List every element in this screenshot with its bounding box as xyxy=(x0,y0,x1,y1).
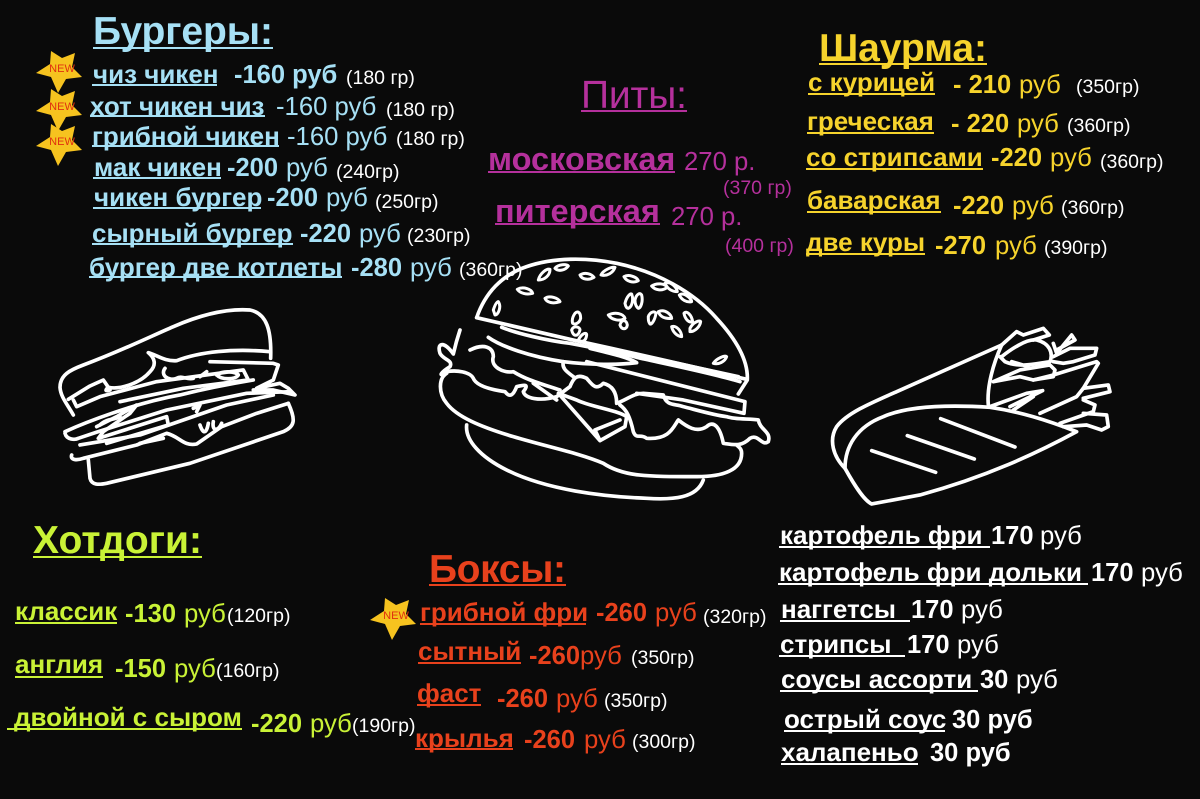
row: бургер две котлеты xyxy=(89,252,522,282)
heading: boxes: Боксы: xyxy=(429,548,566,591)
row: классик: классик xyxy=(15,596,118,626)
row: картофель фри: 170 xyxy=(991,522,1034,550)
row: соусы ассорти: руб xyxy=(1016,666,1058,694)
row: две куры: (390гр) xyxy=(1044,237,1107,259)
row: грибной фри xyxy=(420,597,766,628)
row: греческая: (360гр) xyxy=(1067,115,1130,137)
row: сытный: сытный xyxy=(418,636,521,666)
icon: new badge 2: NEW xyxy=(49,101,75,113)
row: со стрипсами: со стрипсами xyxy=(806,142,983,172)
row: классик: руб xyxy=(184,600,226,628)
icon: new badge 4: NEW xyxy=(383,610,409,622)
section: boxes xyxy=(415,548,766,754)
row: баварская: -220 xyxy=(953,192,1004,220)
row: наггетсы xyxy=(780,594,1003,624)
row: мак чикен xyxy=(93,152,399,183)
row: классик: -130 xyxy=(125,600,176,628)
row: бургер две котлеты: руб xyxy=(410,254,452,282)
row: англия: -150 xyxy=(115,655,166,683)
weight: 370: (370 гр) xyxy=(723,177,792,199)
icon: new badge 2 xyxy=(36,89,82,131)
row: крылья: руб xyxy=(584,726,626,754)
row: сырный бургер: сырный бургер xyxy=(92,218,293,248)
row: грибной фри: грибной фри xyxy=(420,597,588,627)
row: сытный: (350гр) xyxy=(631,647,694,669)
row: сытный xyxy=(418,636,694,670)
heading: hot dogs: Хотдоги: xyxy=(33,519,202,562)
row: острый соус: 30 руб xyxy=(952,706,1033,734)
row: фаст xyxy=(417,678,667,713)
row: питерская: питерская xyxy=(495,193,660,229)
row: чикен бургер: (250гр) xyxy=(375,191,438,213)
icon: new badge 3 xyxy=(36,124,82,166)
row: двойной с сыром: -220 xyxy=(251,710,302,738)
row: стрипсы xyxy=(779,629,999,659)
row: греческая: греческая xyxy=(807,106,934,136)
row: хот чикен чиз: -160 руб xyxy=(276,93,376,121)
section: pitas xyxy=(488,74,794,257)
row: со стрипсами: -220 xyxy=(991,144,1042,172)
heading: pitas: Питы: xyxy=(581,74,687,117)
row: грибной чикен: -160 руб xyxy=(287,123,387,151)
icon: burger line drawing xyxy=(439,259,769,499)
row: классик xyxy=(15,596,290,628)
row: грибной фри: -260 xyxy=(596,599,647,627)
row: баварская: руб xyxy=(1012,192,1054,220)
row: двойной с сыром: (190гр) xyxy=(352,715,415,737)
row: наггетсы: руб xyxy=(961,596,1003,624)
row: греческая: - 220 xyxy=(951,110,1009,138)
burger list xyxy=(89,59,522,282)
row: две куры: две куры xyxy=(806,227,925,257)
row: картофель фри дольки: картофель фри дольки xyxy=(779,557,1082,587)
row: сырный бургер: (230гр) xyxy=(407,225,470,247)
row: мак чикен: -200 xyxy=(227,154,278,182)
row: со стрипсами: руб xyxy=(1050,144,1092,172)
row: халапеньо xyxy=(781,737,1011,767)
row: питерская: 270 р. xyxy=(671,203,742,231)
section: hot dogs xyxy=(7,519,415,738)
row: сырный бургер: руб xyxy=(359,220,401,248)
row: московская: московская xyxy=(488,141,675,177)
row: картофель фри дольки: руб xyxy=(1141,559,1183,587)
row: грибной чикен xyxy=(92,121,465,151)
row: фаст: руб xyxy=(556,685,598,713)
row: соусы ассорти xyxy=(780,664,1058,694)
row: баварская: (360гр) xyxy=(1061,197,1124,219)
row: фаст: (350гр) xyxy=(604,690,667,712)
row: фаст: фаст xyxy=(417,678,482,708)
row: наггетсы: 170 xyxy=(911,596,954,624)
row: московская: 270 р. xyxy=(684,148,755,176)
row: с курицей: - 210 xyxy=(953,71,1011,99)
row: мак чикен: мак чикен xyxy=(94,152,222,182)
row: сырный бургер xyxy=(92,218,470,248)
row: халапеньо: 30 руб xyxy=(930,739,1011,767)
row: с курицей xyxy=(808,67,1139,99)
row: сытный: -260 xyxy=(529,642,580,670)
row: стрипсы: 170 xyxy=(907,631,950,659)
row: две куры xyxy=(806,227,1107,260)
row: грибной чикен: (180 гр) xyxy=(396,128,465,150)
row: картофель фри xyxy=(779,520,1082,550)
icon: new badge 3: NEW xyxy=(49,136,75,148)
row: стрипсы: руб xyxy=(957,631,999,659)
row: классик: (120гр) xyxy=(227,605,290,627)
row: крылья: крылья xyxy=(415,723,514,753)
row: две куры: руб xyxy=(995,232,1037,260)
row: картофель фри дольки: 170 xyxy=(1091,559,1134,587)
row: со стрипсами: (360гр) xyxy=(1100,151,1163,173)
row: наггетсы: наггетсы xyxy=(781,594,896,624)
row: греческая: руб xyxy=(1017,110,1059,138)
row: хот чикен чиз xyxy=(90,91,455,121)
row: хот чикен чиз: (180 гр) xyxy=(386,99,455,121)
row: англия: (160гр) xyxy=(216,660,279,682)
row: чикен бургер: чикен бургер xyxy=(94,182,262,212)
row: чикен бургер xyxy=(93,182,438,213)
icon: sandwich line drawing xyxy=(60,310,295,484)
row: чиз чикен: (180 гр) xyxy=(346,67,415,89)
row: сырный бургер: -220 xyxy=(300,220,351,248)
row: чикен бургер: -200 xyxy=(267,184,318,212)
row: халапеньо: халапеньо xyxy=(781,737,919,767)
row: соусы ассорти: соусы ассорти xyxy=(781,664,972,694)
row: питерская xyxy=(495,193,742,231)
row: бургер две котлеты: бургер две котлеты xyxy=(89,252,342,282)
row: хот чикен чиз: хот чикен чиз xyxy=(90,91,265,121)
row: грибной фри: (320гр) xyxy=(703,606,766,628)
row: англия: руб xyxy=(174,655,216,683)
icon: new badge 1: NEW xyxy=(49,63,75,75)
heading: burgers: Бургеры: xyxy=(93,10,273,53)
row: двойной с сыром: двойной с сыром xyxy=(14,702,242,732)
heading: shawarma: Шаурма: xyxy=(819,27,987,70)
section: shawarma xyxy=(806,27,1163,260)
icon: shawarma wrap line drawing xyxy=(833,328,1110,504)
row: бургер две котлеты: -280 xyxy=(351,254,402,282)
row: чиз чикен xyxy=(92,59,415,89)
row: фаст: -260 xyxy=(497,685,548,713)
row: крылья: (300гр) xyxy=(632,731,695,753)
row: с курицей: (350гр) xyxy=(1076,76,1139,98)
row: крылья: -260 xyxy=(524,726,575,754)
row: англия: англия xyxy=(15,649,103,679)
icon: new badge 1 xyxy=(36,51,82,93)
row: баварская: баварская xyxy=(807,185,941,215)
weight: 400: (400 гр) xyxy=(725,235,794,257)
row: сытный: руб xyxy=(580,642,622,670)
row: мак чикен: (240гр) xyxy=(336,161,399,183)
row: грибной фри: руб xyxy=(655,599,697,627)
row: греческая xyxy=(807,106,1130,138)
row: с курицей: с курицей xyxy=(808,67,935,97)
row: двойной с сыром: руб xyxy=(310,710,352,738)
icon: new badge 4 xyxy=(370,598,416,640)
row: двойной с сыром xyxy=(7,702,415,738)
row: острый соус xyxy=(784,704,1033,734)
row: со стрипсами xyxy=(806,142,1163,173)
row: грибной чикен: грибной чикен xyxy=(92,121,280,151)
row: чиз чикен: -160 руб xyxy=(234,61,337,89)
row: бургер две котлеты: (360гр) xyxy=(459,259,522,281)
row: с курицей: руб xyxy=(1019,71,1061,99)
row: баварская xyxy=(807,185,1124,220)
row: чикен бургер: руб xyxy=(326,184,368,212)
row: англия xyxy=(15,649,279,683)
row: соусы ассорти: 30 xyxy=(980,666,1008,694)
row: крылья xyxy=(415,723,695,754)
row: картофель фри: руб xyxy=(1040,522,1082,550)
row: стрипсы: стрипсы xyxy=(780,629,891,659)
row: чиз чикен: чиз чикен xyxy=(93,59,218,89)
row: мак чикен: руб xyxy=(286,154,328,182)
row: картофель фри: картофель фри xyxy=(780,520,982,550)
section: sides xyxy=(778,520,1183,767)
row: две куры: -270 xyxy=(935,232,986,260)
row: острый соус: острый соус xyxy=(784,704,946,734)
